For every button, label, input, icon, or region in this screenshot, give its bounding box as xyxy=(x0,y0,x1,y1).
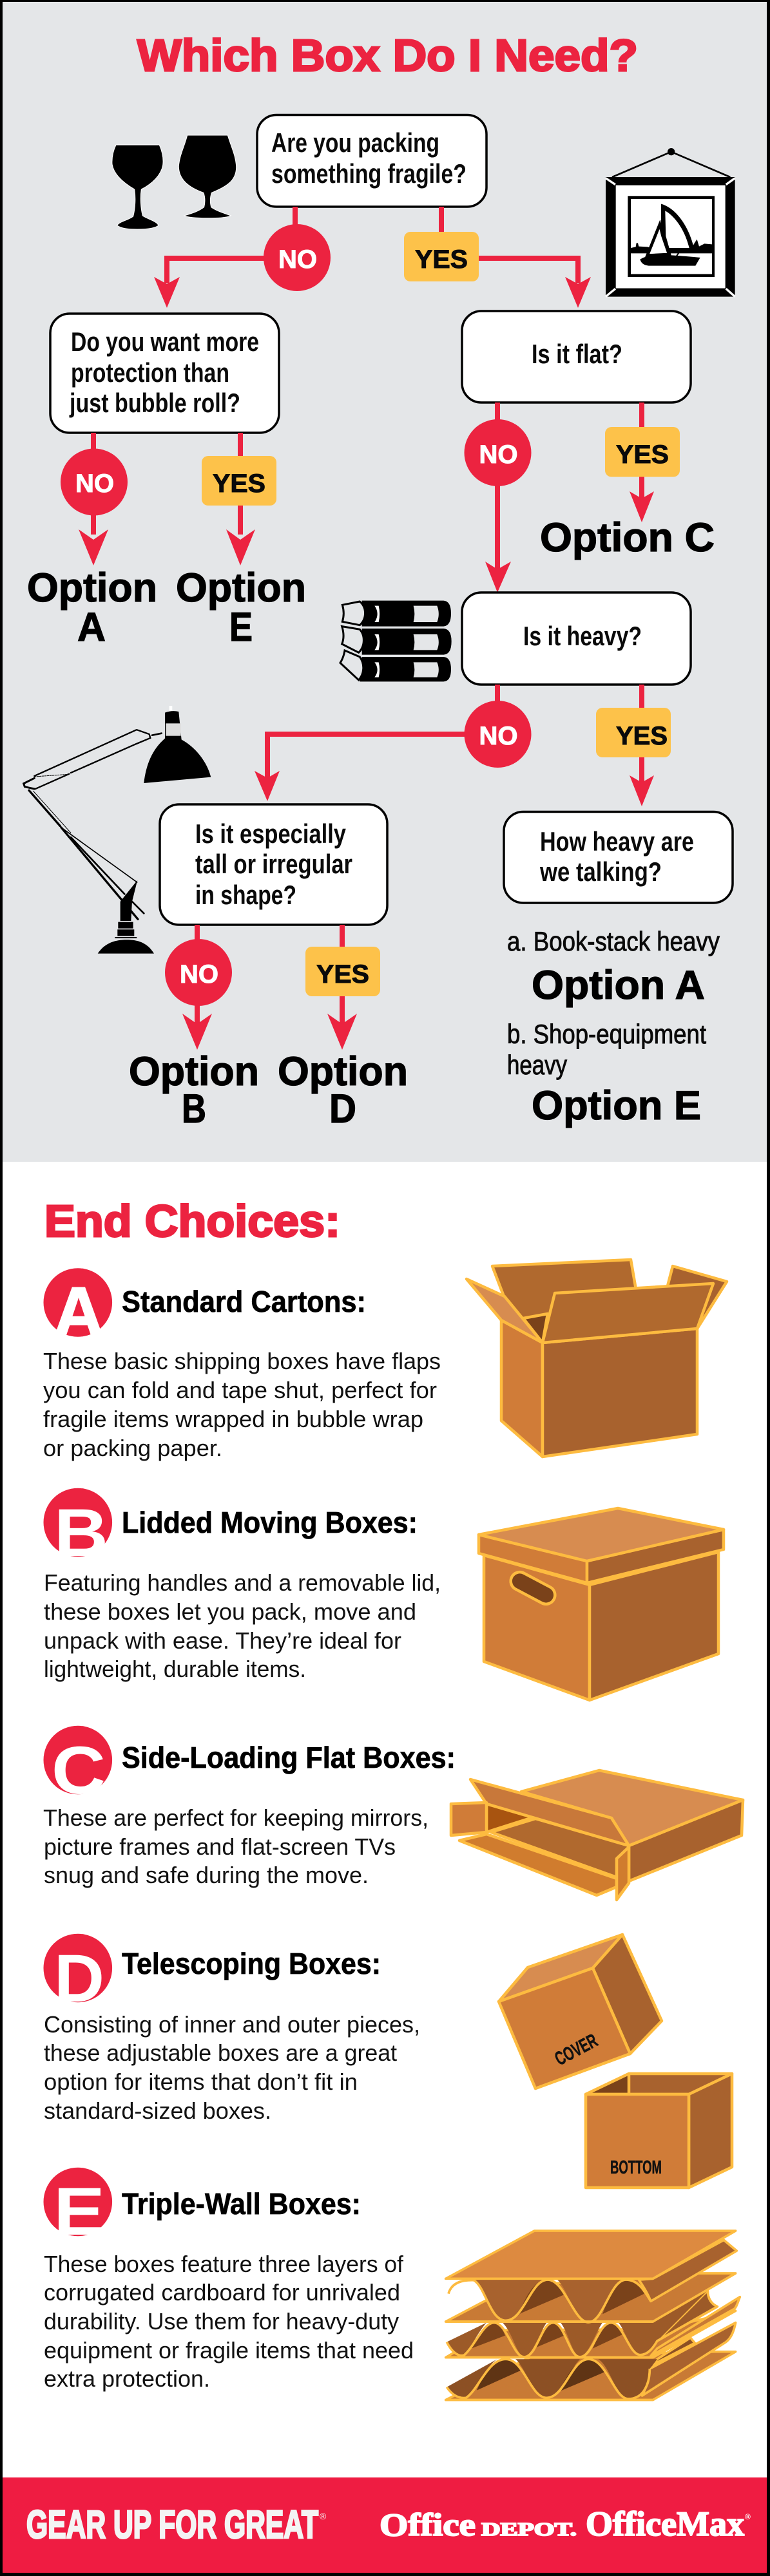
illustration: corrugated layers xyxy=(446,2231,740,2400)
arrow: flat YES to option C xyxy=(630,402,654,522)
option D label: Option xyxy=(278,1049,408,1094)
question: especially tall or irregular: in shape? xyxy=(195,880,296,910)
description xyxy=(43,1804,428,1888)
badge: YES xyxy=(404,232,479,281)
choice C: side-loading flat boxes xyxy=(43,1726,743,1900)
badge: YES: YES xyxy=(213,469,265,498)
answer b: shop-equipment heavy: heavy xyxy=(507,1050,567,1080)
description: These are perfect for keeping mirrors, xyxy=(43,1804,428,1831)
tagline: ® xyxy=(320,2511,327,2521)
logo: OfficeMax: ® xyxy=(745,2512,751,2521)
description: Consisting of inner and outer pieces, xyxy=(44,2011,420,2038)
footer banner xyxy=(3,2477,767,2573)
badge: C: C xyxy=(52,1733,106,1808)
option A label xyxy=(27,565,157,650)
option C label: Option C xyxy=(540,515,715,560)
badge: B xyxy=(44,1488,112,1571)
badge: NO xyxy=(464,419,531,486)
heading: end choices: End Choices: xyxy=(44,1196,340,1246)
question: is it heavy xyxy=(462,592,691,685)
description xyxy=(44,2011,420,2124)
description: extra protection. xyxy=(44,2365,210,2392)
description: snug and safe during the move. xyxy=(44,1862,369,1888)
badge: E: E xyxy=(53,2174,105,2249)
question: how heavy are we talking xyxy=(504,811,733,903)
description: these boxes let you pack, move and xyxy=(44,1598,416,1625)
badge: YES xyxy=(202,456,276,506)
heading: Triple-Wall Boxes: xyxy=(122,2187,361,2221)
arrow: heavy NO to tall question xyxy=(255,685,497,801)
option E label xyxy=(176,565,306,650)
option B label: B xyxy=(182,1086,206,1132)
description: you can fold and tape shut, perfect for xyxy=(43,1377,437,1403)
icon: wine glasses xyxy=(112,135,236,229)
option B label: Option xyxy=(129,1049,259,1094)
description: or packing paper. xyxy=(43,1435,222,1461)
option E label: Option xyxy=(176,565,306,611)
heading: Side-Loading Flat Boxes: xyxy=(122,1741,456,1774)
description: Featuring handles and a removable lid, xyxy=(44,1569,441,1596)
heading: Lidded Moving Boxes: xyxy=(122,1506,418,1539)
description: lightweight, durable items. xyxy=(44,1656,306,1682)
logo: Office Depot: Office xyxy=(380,2506,476,2543)
illustration: lidded box xyxy=(479,1508,724,1700)
badge: YES: YES xyxy=(415,245,468,274)
illustration: open carton xyxy=(467,1260,727,1457)
badge: C xyxy=(44,1726,112,1808)
choice D: telescoping boxes xyxy=(44,1934,732,2188)
badge: YES xyxy=(305,947,380,996)
badge: YES xyxy=(605,427,680,477)
heading: Standard Cartons: xyxy=(122,1285,366,1318)
description xyxy=(43,1348,441,1461)
question: especially tall or irregular: Is it especially xyxy=(195,819,347,849)
badge: NO xyxy=(61,448,128,515)
answer a: book-stack heavy: Option A xyxy=(532,963,705,1008)
description: durability. Use them for heavy-duty xyxy=(44,2308,399,2334)
answer b: shop-equipment heavy xyxy=(507,1019,706,1128)
question: especially tall or irregular: tall or irregular xyxy=(195,849,352,879)
arrow: tall NO to option B xyxy=(182,925,212,1050)
badge: NO: NO xyxy=(180,960,218,989)
question: is it flat: Is it flat? xyxy=(532,339,622,369)
logo: OfficeMax: OfficeMax xyxy=(586,2505,744,2543)
answer a: book-stack heavy: a. Book-stack heavy xyxy=(507,926,720,956)
badge: YES: YES xyxy=(616,722,668,750)
heading: Telescoping Boxes: xyxy=(122,1947,381,1980)
choice A: standard cartons xyxy=(43,1260,727,1461)
question: is it flat xyxy=(462,311,691,402)
arrow: flat NO to heavy question xyxy=(485,402,511,592)
icon: desk lamp xyxy=(24,706,211,954)
question: how heavy are we talking: we talking? xyxy=(539,857,662,887)
badge: D: D xyxy=(54,1941,104,2016)
badge: D xyxy=(44,1934,112,2016)
arrow: tall YES to option D xyxy=(327,925,357,1050)
badge: NO xyxy=(464,701,531,768)
badge: YES xyxy=(596,708,671,757)
description: picture frames and flat-screen TVs xyxy=(44,1833,396,1860)
question: do you want more protection: protection than xyxy=(71,357,229,388)
option D label: D xyxy=(329,1086,356,1132)
icon: stack of books xyxy=(340,601,452,681)
description xyxy=(44,2251,414,2392)
logo: Office Depot xyxy=(380,2506,577,2543)
question: do you want more protection xyxy=(50,314,279,433)
option D label xyxy=(278,1049,408,1132)
badge: YES: YES xyxy=(316,960,369,989)
description: These basic shipping boxes have flaps xyxy=(43,1348,441,1374)
choice B: lidded moving boxes xyxy=(44,1488,724,1700)
badge: NO: NO xyxy=(278,245,317,274)
badge: NO xyxy=(264,224,331,291)
logo: Office Depot: DEPOT. xyxy=(481,2520,577,2540)
badge: NO: NO xyxy=(75,469,114,498)
description: standard-sized boxes. xyxy=(44,2098,271,2124)
option B label xyxy=(129,1049,259,1132)
question: do you want more protection: just bubble roll? xyxy=(69,388,240,418)
arrow: heavy YES to how heavy xyxy=(630,685,654,806)
arrow: YES branch to flat question xyxy=(441,207,591,308)
illustration: flat box xyxy=(451,1770,743,1900)
badge: NO: NO xyxy=(479,722,518,750)
arrow: protection NO to option A xyxy=(79,433,108,565)
arrow: NO branch to protection question xyxy=(154,207,295,308)
badge: NO xyxy=(165,939,232,1006)
description: option for items that don’t fit in xyxy=(44,2069,358,2095)
arrow: protection YES to option E xyxy=(226,433,255,565)
badge: YES: YES xyxy=(616,440,669,469)
illustration: bottom box: BOTTOM xyxy=(610,2157,662,2178)
option A label: A xyxy=(77,605,106,650)
question: how heavy are we talking: How heavy are xyxy=(540,826,694,857)
badge: B: B xyxy=(54,1495,108,1571)
option E label: E xyxy=(229,605,253,650)
description: these adjustable boxes are a great xyxy=(44,2040,397,2066)
description: unpack with ease. They’re ideal for xyxy=(44,1627,401,1654)
description: equipment or fragile items that need xyxy=(44,2337,414,2363)
question: are you packing something fragile: something fragile? xyxy=(271,158,467,189)
badge: E xyxy=(44,2168,112,2249)
title: Which Box Do I Need? xyxy=(137,30,638,80)
illustration: bottom box xyxy=(586,2074,732,2188)
illustration: cover box xyxy=(499,1935,662,2088)
description: These boxes feature three layers of xyxy=(44,2251,404,2277)
badge: A: A xyxy=(53,1273,104,1353)
panel: flowchart xyxy=(3,2,767,1162)
description: corrugated cardboard for unrivaled xyxy=(44,2279,400,2306)
illustration: cover box: COVER xyxy=(552,2030,601,2070)
badge: NO: NO xyxy=(479,440,518,469)
question: are you packing something fragile: Are you packing xyxy=(271,128,439,158)
question: is it heavy: Is it heavy? xyxy=(523,621,642,651)
option A label: Option xyxy=(27,565,157,611)
answer a: book-stack heavy xyxy=(507,926,720,1008)
answer b: shop-equipment heavy: b. Shop-equipment xyxy=(507,1019,706,1049)
description xyxy=(44,1569,441,1682)
question: are you packing something fragile xyxy=(257,115,486,207)
answer b: shop-equipment heavy: Option E xyxy=(532,1083,701,1128)
choice E: triple-wall boxes xyxy=(44,2168,740,2400)
icon: framed sailboat picture xyxy=(606,148,735,297)
question: do you want more protection: Do you want more xyxy=(71,327,259,357)
description: fragile items wrapped in bubble wrap xyxy=(43,1406,423,1432)
question: especially tall or irregular xyxy=(160,804,387,925)
tagline: GEAR UP FOR GREAT xyxy=(26,2503,318,2546)
